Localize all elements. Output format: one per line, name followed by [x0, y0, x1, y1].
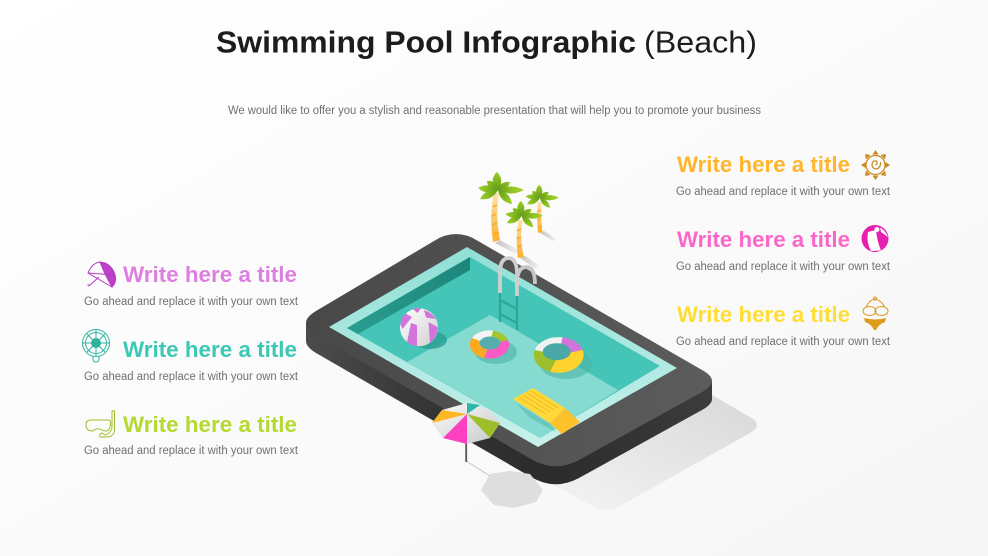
title: bikini item: Write here a title	[677, 302, 850, 327]
description: Go ahead and replace it with your own text	[84, 445, 299, 457]
palm tree right	[526, 185, 559, 233]
right item: sun	[676, 150, 891, 198]
pool left inner wall	[347, 257, 470, 334]
description: Go ahead and replace it with your own text	[676, 186, 891, 198]
pool deck	[306, 234, 712, 466]
description: Go ahead and replace it with your own text	[84, 296, 299, 308]
pool water shallow	[407, 315, 618, 438]
palm tree middle	[505, 201, 543, 258]
illustration: swimming pool	[306, 172, 757, 510]
beach umbrella shadow	[481, 471, 543, 508]
palm tree left	[478, 172, 524, 242]
pool coping	[329, 247, 677, 447]
title: sun item: Write here a title	[677, 152, 850, 177]
left item: snorkel	[84, 411, 299, 457]
icon: snorkel	[86, 411, 114, 437]
left item: fan	[82, 330, 299, 383]
icon: fan	[82, 330, 110, 362]
beach umbrella	[432, 403, 500, 476]
description: Go ahead and replace it with your own text	[676, 336, 891, 348]
sun lounger	[513, 388, 580, 434]
icon: sun	[861, 150, 890, 180]
pool side wall	[306, 252, 712, 484]
title: fan item: Write here a title	[123, 337, 297, 362]
icon: umbrella	[88, 262, 116, 287]
icon: beach ball	[862, 225, 888, 252]
subtitle: We would like to offer you a stylish and reasonable presentation that will help you to promote your business	[228, 105, 761, 117]
swim ring small	[470, 330, 517, 364]
beach ball	[400, 308, 447, 349]
ladder	[500, 258, 535, 330]
description: Go ahead and replace it with your own text	[84, 371, 299, 383]
pool ground shadow	[553, 395, 757, 510]
description: Go ahead and replace it with your own text	[676, 261, 891, 273]
title: (Beach)	[644, 24, 757, 60]
title: ball item: Write here a title	[677, 227, 850, 252]
title: Swimming Pool Infographic	[216, 24, 636, 60]
title: umbrella item: Write here a title	[123, 262, 297, 287]
right item: bikini	[676, 297, 891, 348]
swim ring large	[534, 337, 592, 379]
right item: beach ball	[676, 225, 891, 273]
left item: umbrella	[84, 262, 299, 308]
title: snorkel item: Write here a title	[123, 412, 297, 437]
icon: bikini	[863, 297, 888, 330]
palm tree shadows	[495, 231, 557, 269]
pool water deep	[347, 257, 660, 438]
